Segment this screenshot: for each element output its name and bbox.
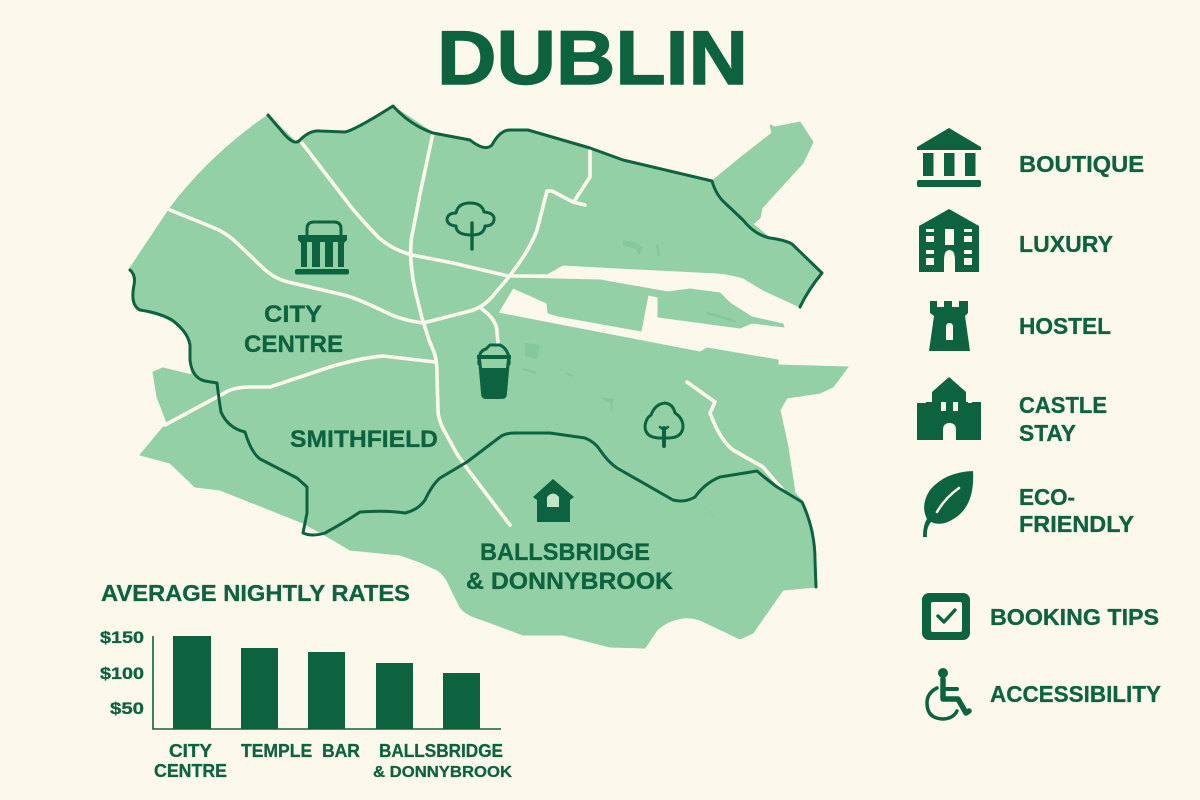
legend: hostel — [929, 301, 1111, 351]
x-axis labels — [154, 741, 513, 781]
legend: boutique: BOUTIQUE — [1019, 151, 1144, 177]
label: Smithfield: SMITHFIELD — [290, 426, 438, 453]
icon: tree south — [645, 403, 683, 446]
legend: luxury: LUXURY — [1019, 231, 1113, 257]
y-axis labels: $100 — [100, 664, 144, 683]
legend: accessibility: ACCESSIBILITY — [990, 681, 1161, 707]
map of Dublin — [130, 106, 848, 648]
map land area — [130, 106, 848, 648]
icon: tree north — [447, 203, 494, 249]
legend: castle stay — [917, 377, 1107, 446]
label: City Centre: CENTRE — [244, 331, 343, 358]
legend: booking tips: BOOKING TIPS — [990, 604, 1159, 630]
x-axis labels: CENTRE — [154, 761, 227, 781]
axes — [153, 636, 501, 729]
legend: booking tips — [922, 593, 1159, 640]
x-axis labels: BALLSBRIDGE — [379, 741, 503, 761]
legend: eco-friendly: FRIENDLY — [1019, 511, 1134, 537]
legend: castle stay: CASTLE — [1019, 392, 1107, 418]
legend: hostel: HOSTEL — [1019, 313, 1111, 339]
legend: boutique — [917, 128, 1144, 187]
label: Ballsbridge and Donnybrook: BALLSBRIDGE — [480, 539, 650, 566]
y-axis labels: $150 — [100, 628, 144, 647]
bars — [173, 636, 480, 729]
icon: temple — [295, 222, 349, 274]
label: Ballsbridge and Donnybrook — [466, 539, 674, 595]
roads — [165, 133, 783, 525]
legend: castle stay: STAY — [1019, 420, 1076, 446]
y-axis labels — [100, 628, 144, 718]
district boundaries — [130, 106, 822, 587]
icon: bucket — [477, 345, 511, 399]
legend: eco-friendly — [923, 471, 1134, 537]
bar chart: average nightly rates — [100, 580, 513, 781]
title: DUBLIN — [437, 16, 748, 101]
legend — [917, 128, 1161, 719]
x-axis labels: & DONNYBROOK — [373, 764, 513, 781]
label: City Centre: CITY — [264, 301, 322, 328]
y-axis labels: $50 — [110, 699, 144, 718]
chart title: AVERAGE NIGHTLY RATES — [101, 580, 410, 606]
label: City Centre — [244, 301, 343, 358]
legend: eco-friendly: ECO- — [1019, 484, 1075, 510]
legend: accessibility — [927, 668, 1161, 719]
icon: house — [533, 479, 574, 522]
x-axis labels: TEMPLE BAR — [241, 741, 360, 761]
x-axis labels: CITY — [169, 741, 212, 761]
label: Ballsbridge and Donnybrook: & DONNYBROOK — [466, 568, 674, 595]
legend: luxury — [919, 209, 1113, 272]
